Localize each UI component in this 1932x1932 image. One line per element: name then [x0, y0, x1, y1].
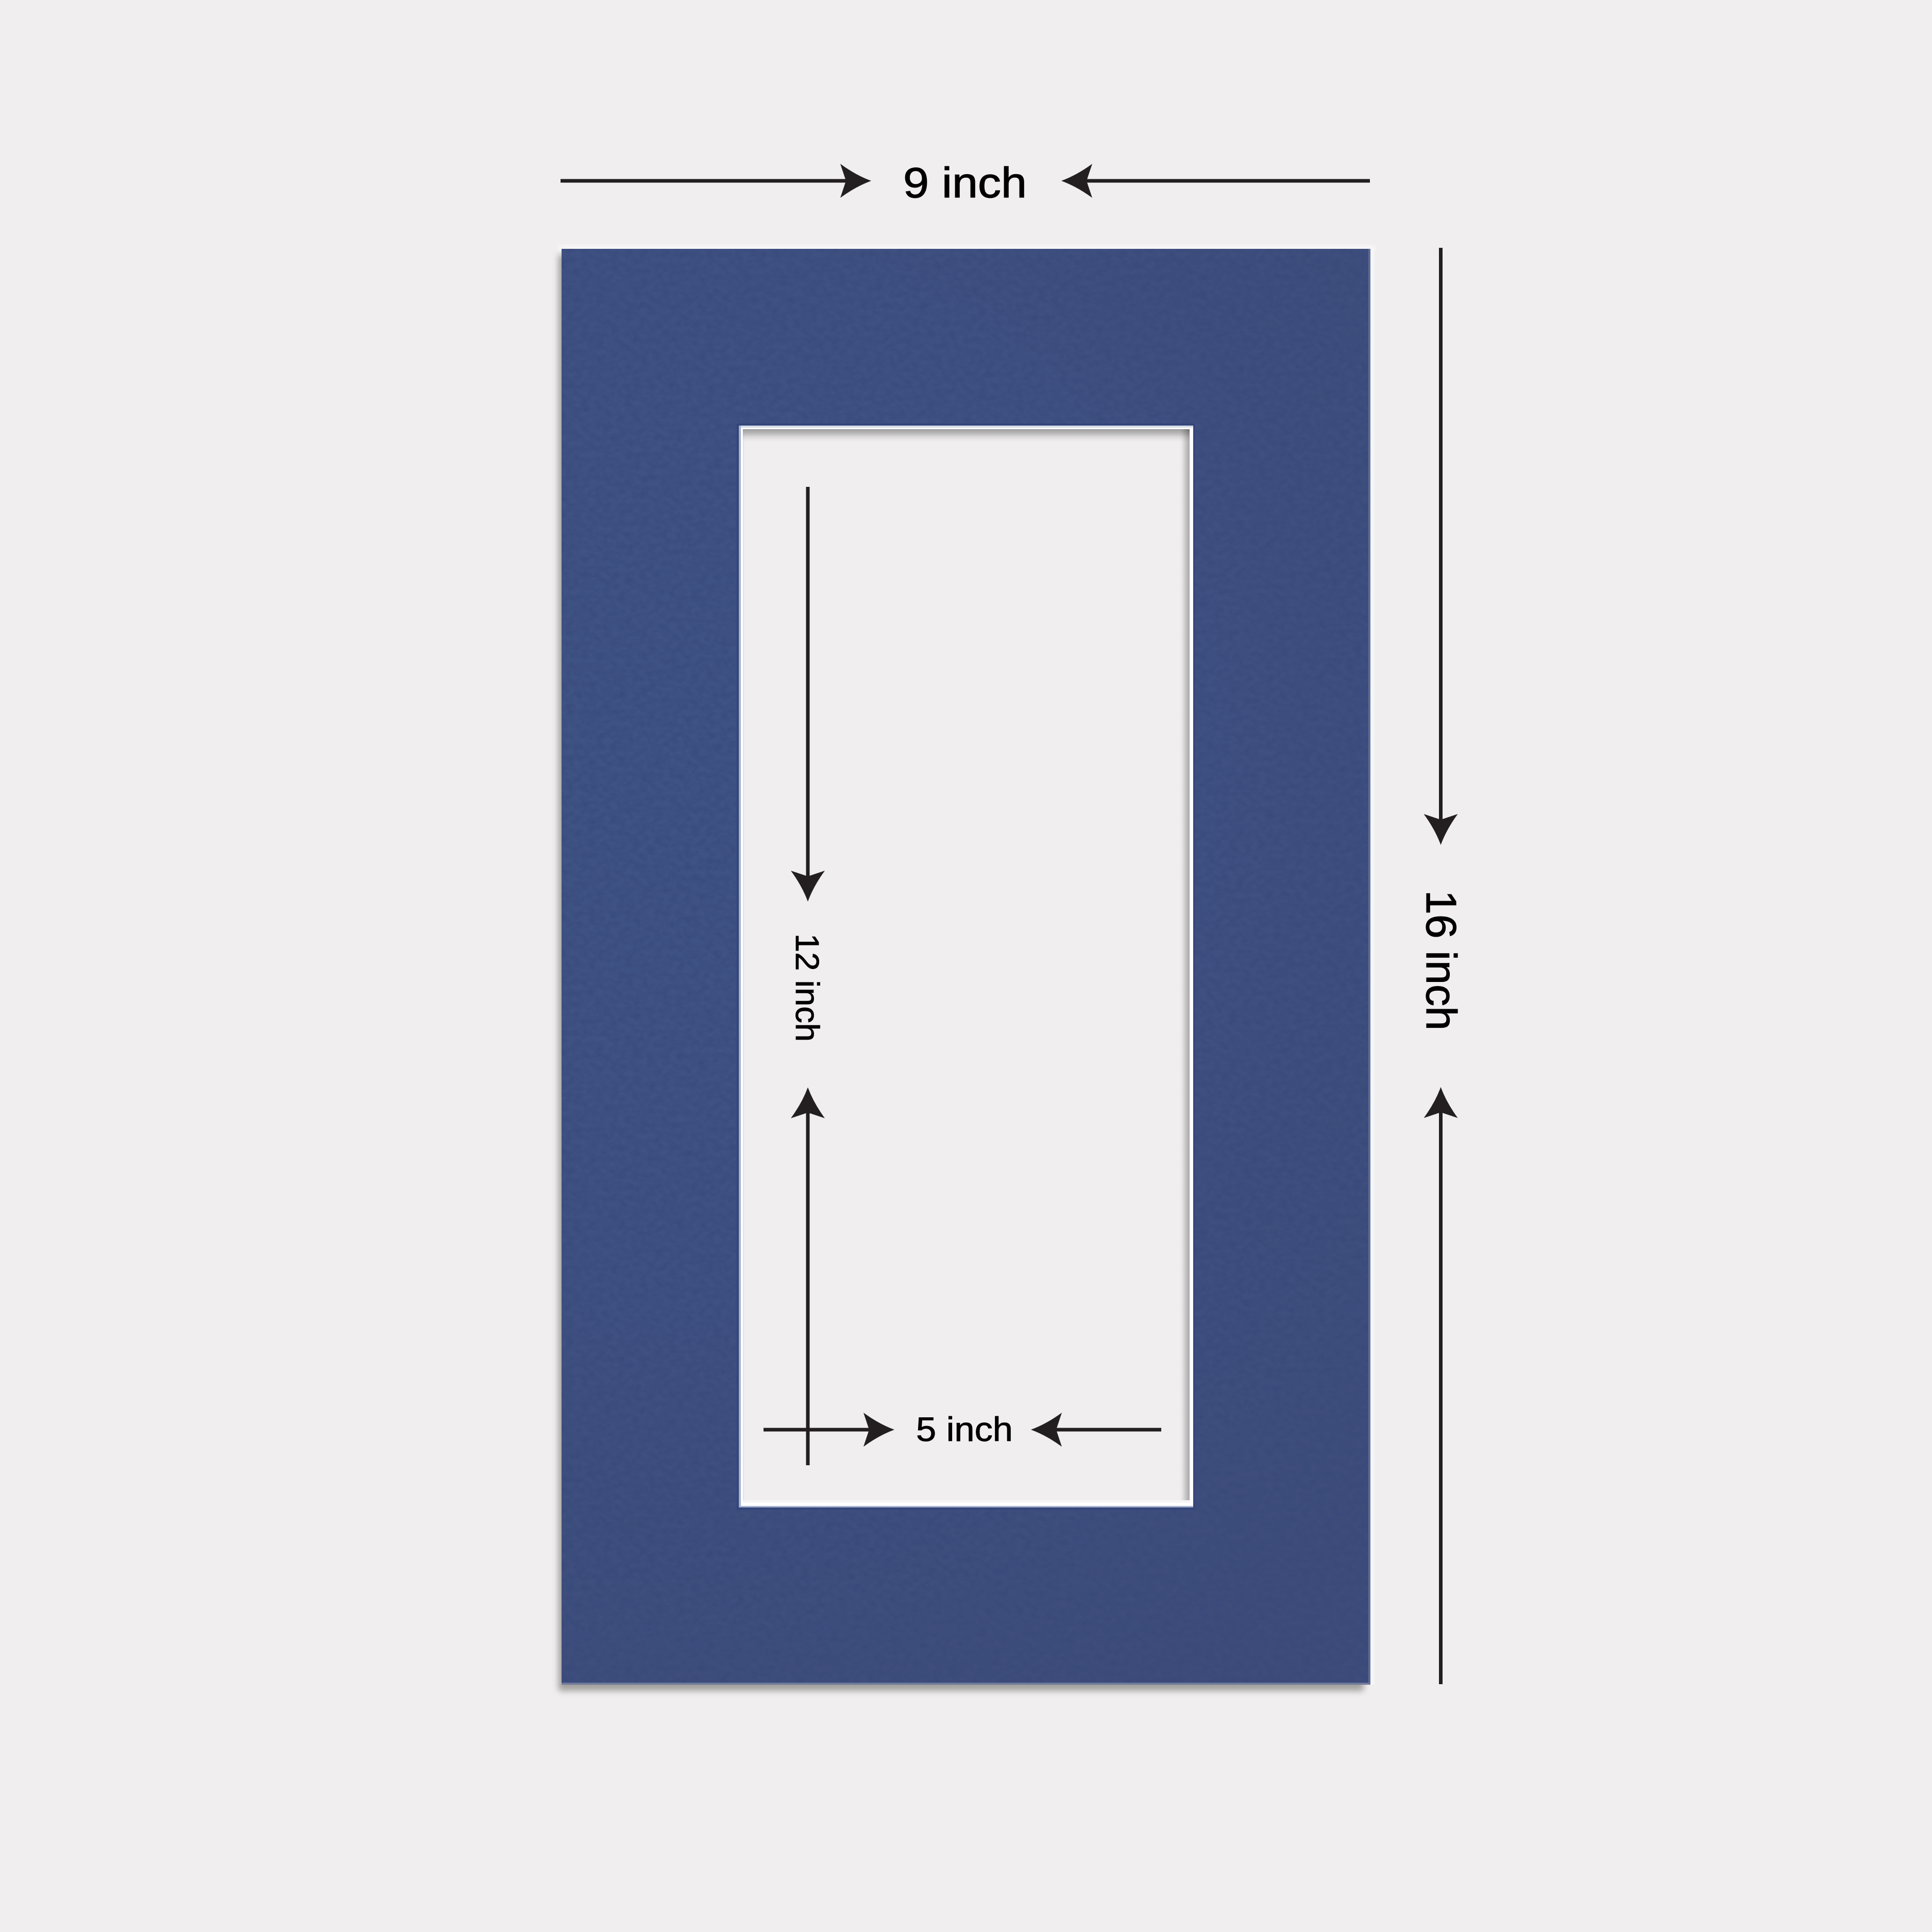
panel: blue mat board with window [558, 245, 1375, 1691]
arrow: window width pointing right [764, 1413, 894, 1447]
arrow: window width pointing left [1031, 1413, 1161, 1447]
label: window height: 12 inch [789, 934, 826, 1042]
arrow: outer right pointing up [1424, 1087, 1458, 1684]
arrow: window height pointing down [791, 487, 825, 902]
arrow: top right pointing left [1061, 164, 1370, 198]
arrow: window height pointing up [791, 1087, 825, 1465]
label: overall height: 16 inch [1417, 890, 1465, 1030]
label: window width: 5 inch [916, 1410, 1013, 1448]
arrow: outer right pointing down [1424, 248, 1458, 845]
arrow: top left pointing right [561, 164, 871, 198]
heading: overall width label: 9 inch [903, 159, 1027, 207]
